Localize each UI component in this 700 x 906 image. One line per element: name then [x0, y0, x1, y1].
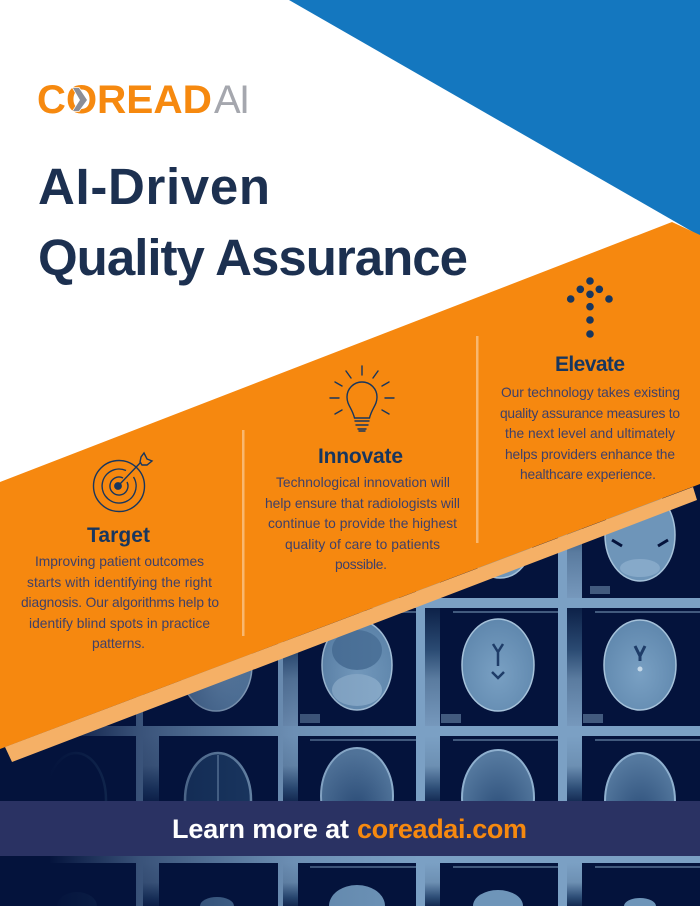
banner: call to action [0, 801, 700, 856]
text: Innovate body [265, 475, 460, 572]
icon: dotted up arrow [567, 277, 613, 338]
text: Target body: diagnosis. Our algorithms help to [21, 595, 219, 610]
banner: call to action: Learn more at [172, 814, 349, 844]
text: Innovate body: help ensure that radiologists will [265, 496, 460, 511]
text: Elevate body [500, 385, 680, 482]
heading: Target: Target [87, 524, 150, 547]
text: Innovate body: continue to provide the highest [268, 516, 457, 531]
icon: light bulb [330, 366, 394, 431]
text: Elevate body: the next level and ultimately [505, 426, 675, 441]
panel: Target [21, 453, 219, 651]
text: Target body: starts with identifying the right [27, 575, 212, 590]
panel: Innovate [265, 366, 460, 572]
title [38, 158, 468, 286]
text: Innovate body: possible. [335, 557, 387, 572]
logo: CoreadAI [37, 78, 250, 122]
shape: blue corner triangle [289, 0, 700, 236]
text: Elevate body: healthcare experience. [520, 467, 656, 482]
brain slices row 2 [180, 619, 676, 711]
heading: Innovate: Innovate [318, 445, 403, 468]
brain slices row 3 [46, 748, 675, 849]
title: AI-Driven [38, 158, 270, 215]
text: Elevate body: Our technology takes existing [501, 385, 680, 400]
text: Elevate body: quality assurance measures to [500, 406, 680, 421]
logo: CoreadAI: AI [214, 78, 250, 122]
text: Innovate body: Technological innovation will [276, 475, 450, 490]
logo: CoreadAI: C [37, 78, 66, 122]
text: Target body [21, 554, 219, 651]
logo: CoreadAI: O [66, 78, 97, 122]
heading: Elevate: Elevate [555, 353, 625, 376]
panel: orange diagonal band [0, 222, 700, 749]
text: Target body: identify blind spots in practice [29, 616, 210, 631]
panel: Elevate [500, 277, 680, 482]
image: CT scan film grid [0, 484, 700, 906]
brain slices row 4 [57, 885, 656, 906]
text: Elevate body: helps providers enhance the [505, 447, 675, 462]
shape: light orange strip [5, 487, 697, 762]
banner: call to action: coreadai.com [357, 814, 527, 844]
logo: CoreadAI: READ [97, 78, 212, 122]
title: Quality Assurance [38, 229, 468, 286]
text: Target body: patterns. [92, 636, 145, 651]
text: Innovate body: quality of care to patients [285, 537, 440, 552]
text: Target body: Improving patient outcomes [35, 554, 204, 569]
divider: right [476, 336, 478, 543]
divider: left [242, 430, 244, 636]
brain slices row 1 [468, 489, 675, 581]
icon: target with arrow [94, 453, 152, 512]
